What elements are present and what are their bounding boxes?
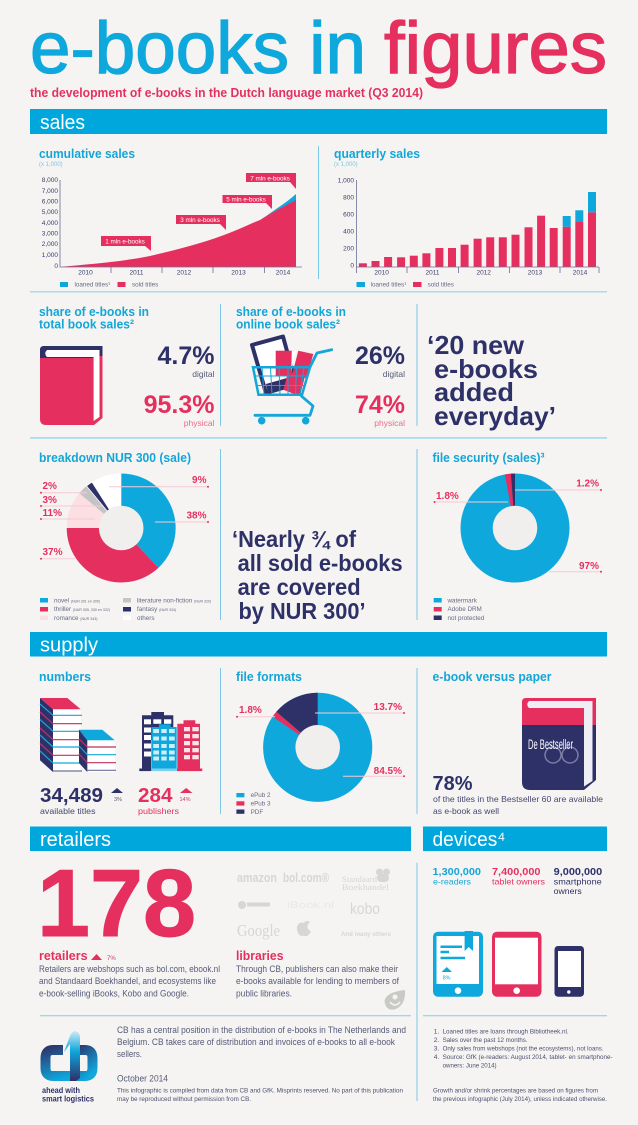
panel: file formats: file formats bbox=[236, 669, 302, 684]
icon: tablet bbox=[492, 932, 542, 997]
area chart bbox=[60, 180, 302, 273]
panel: quarterly sales: 2012 bbox=[476, 270, 491, 276]
footnotes: Sales over the past 12 months. bbox=[443, 1037, 528, 1044]
bar chart bbox=[356, 180, 599, 273]
icon: red book bbox=[40, 346, 102, 425]
panel: cumulative sales: 2014 bbox=[276, 270, 291, 276]
leader labels bbox=[236, 702, 405, 777]
legend bbox=[434, 598, 485, 622]
leader labels: 1.8% bbox=[239, 705, 262, 716]
panel: cumulative sales: 3,000 bbox=[42, 230, 58, 238]
text block: libraries bbox=[236, 948, 399, 998]
icon: bestseller book: De Bestseller bbox=[528, 736, 573, 752]
icon: library logo bbox=[384, 990, 405, 1010]
panel: cumulative sales: 8,000 bbox=[42, 177, 58, 184]
tagline: smart logistics bbox=[42, 1094, 95, 1104]
leader labels: 1.2% bbox=[576, 478, 599, 490]
legend: loaned titles¹ bbox=[371, 282, 406, 288]
panel: share of e-books in online book sales bbox=[236, 304, 405, 428]
panel: quarterly sales: 600 bbox=[343, 212, 354, 218]
footnotes: Growth and/or shrink percentages are based on figures from bbox=[433, 1088, 598, 1095]
section bar: supply bbox=[30, 632, 607, 656]
devices counts: 9,000,000 bbox=[554, 866, 602, 878]
text block: about CB: sellers. bbox=[117, 1049, 142, 1059]
stat: available titles bbox=[40, 785, 123, 816]
legend: Adobe DRM bbox=[448, 606, 482, 613]
text block: about CB: October 2014 bbox=[117, 1074, 168, 1084]
panel: e-book versus paper bbox=[432, 669, 603, 816]
text block: retailers: Retailers are webshops such as bol.com, ebook.nl bbox=[39, 964, 220, 974]
panel: e-book versus paper: of the titles in the Bestseller 60 are available bbox=[433, 794, 603, 804]
text block: libraries: libraries bbox=[236, 948, 284, 963]
section bar: sales: sales bbox=[40, 112, 85, 134]
quote: 20 new e-books: added bbox=[434, 377, 514, 407]
panel: quarterly sales: quarterly sales bbox=[334, 146, 420, 161]
stat: publishers bbox=[138, 785, 192, 816]
panel: cumulative sales: 2011 bbox=[130, 270, 144, 276]
quote: nearly three quarters: ‘Nearly ¾ of bbox=[232, 526, 356, 552]
leader labels bbox=[40, 475, 209, 560]
retailer logos: kobo bbox=[350, 901, 380, 918]
leader labels: 1.8% bbox=[436, 491, 459, 502]
subtitle: the development of e-books in the Dutch language market (Q3 2014) bbox=[30, 85, 423, 100]
title bbox=[30, 8, 607, 89]
panel: cumulative sales: 2,000 bbox=[42, 241, 58, 248]
callout: 5 mln bbox=[222, 195, 272, 209]
section bar: devices: devices⁴ bbox=[432, 829, 506, 851]
text block: retailers: retailers bbox=[39, 948, 88, 963]
footnotes: 3. bbox=[434, 1045, 439, 1052]
callout: 1 mln bbox=[101, 236, 151, 251]
text block: about CB: This infographic is compiled from data from CB and GfK. Misprints reserved. No part of this publication bbox=[117, 1088, 403, 1095]
retailer logos: bol.com® bbox=[283, 871, 330, 885]
text block: about CB: Belgium. CB takes care of distribution and invoices of e-books to all e-book bbox=[117, 1037, 395, 1047]
retailer logos: Google bbox=[237, 921, 280, 940]
footnotes: 4. bbox=[434, 1054, 439, 1061]
icon: shopping cart bbox=[252, 336, 332, 425]
donut chart: NUR 300 bbox=[67, 474, 176, 582]
legend: sold titles bbox=[428, 282, 454, 288]
panel: numbers: numbers bbox=[39, 669, 91, 684]
devices counts: owners bbox=[554, 886, 582, 896]
panel: cumulative sales: (x 1,000) bbox=[39, 162, 63, 168]
panel: share of e-books in online book sales: digital bbox=[383, 369, 405, 379]
legend: ePub 3 bbox=[251, 800, 271, 808]
quote: 20 new e-books: everyday’ bbox=[434, 401, 556, 431]
leader labels: 84.5% bbox=[374, 766, 402, 777]
panel: share of e-books in total book sales bbox=[39, 304, 215, 428]
footnotes: 1. bbox=[434, 1028, 439, 1035]
leader labels: 3% bbox=[42, 495, 57, 506]
stat: available titles: 34,489 bbox=[40, 785, 103, 807]
tagline: ahead with bbox=[42, 1086, 80, 1095]
panel: quarterly sales: 2010 bbox=[374, 270, 389, 276]
quote: 20 new e-books: e-books bbox=[434, 354, 538, 384]
legend: thriller (NUR 305, 330 en 332) bbox=[54, 606, 110, 613]
text block: retailers: 7% bbox=[107, 956, 116, 962]
panel: e-book versus paper: 78% bbox=[432, 773, 473, 795]
legend: not protected bbox=[448, 615, 485, 622]
section bar: retailers bbox=[30, 826, 411, 851]
text block: libraries: Through CB, publishers can also make their bbox=[236, 964, 398, 974]
retailer logos: iBook.nl bbox=[287, 900, 334, 910]
panel: cumulative sales: cumulative sales bbox=[39, 146, 135, 161]
panel: cumulative sales: 0 bbox=[54, 263, 58, 270]
quote: 20 new e-books bbox=[427, 330, 556, 431]
icon: buildings bbox=[139, 712, 202, 771]
retailer logos: And many others bbox=[341, 931, 391, 938]
leader labels: 11% bbox=[42, 508, 62, 519]
panel: cumulative sales: 2012 bbox=[177, 270, 192, 276]
legend bbox=[356, 282, 454, 288]
panel: quarterly sales: 0 bbox=[350, 262, 354, 270]
stat: available titles: available titles bbox=[40, 806, 96, 816]
devices counts: 1,300,000 bbox=[432, 866, 481, 878]
panel: file security bbox=[432, 450, 602, 622]
panel: cumulative sales: 2013 bbox=[231, 270, 246, 276]
leader labels: 37% bbox=[42, 547, 63, 558]
stat: publishers: 14% bbox=[180, 797, 191, 803]
panel: share of e-books in total book sales: total book sales² bbox=[39, 316, 135, 332]
text block: about CB: CB has a central position in the distribution of e-books in The Netherlands and bbox=[117, 1025, 406, 1035]
panel: quarterly sales: 800 bbox=[343, 194, 354, 202]
panel: cumulative sales: 1,000 bbox=[42, 252, 58, 259]
panel: quarterly sales bbox=[334, 146, 599, 288]
panel: numbers bbox=[39, 669, 202, 816]
stat: available titles: 3% bbox=[114, 797, 122, 803]
section bar: supply: supply bbox=[40, 634, 98, 656]
panel: e-book versus paper: as e-book as well bbox=[433, 806, 499, 816]
panel: share of e-books in online book sales: online book sales² bbox=[236, 316, 341, 332]
devices counts: tablet owners bbox=[492, 876, 545, 886]
legend bbox=[236, 792, 271, 816]
panel: cumulative sales: 7,000 bbox=[42, 188, 58, 195]
retailer logos: Boekhandel bbox=[342, 883, 390, 892]
leader labels: 9% bbox=[192, 475, 207, 486]
quote: 20 new e-books: ‘20 new bbox=[427, 330, 525, 360]
stat: publishers: 284 bbox=[138, 785, 173, 807]
retailer logos: Standaard bbox=[342, 875, 377, 884]
legend: ePub 2 bbox=[251, 792, 271, 799]
icon: smartphone bbox=[554, 946, 584, 997]
devices counts: 7,400,000 bbox=[492, 866, 541, 878]
title: figures bbox=[384, 8, 607, 89]
section bar: sales bbox=[30, 109, 607, 134]
footnotes: Only sales from webshops (not the ecosystems), not loans. bbox=[443, 1045, 604, 1052]
leader labels: 13.7% bbox=[374, 702, 402, 713]
legend: others bbox=[137, 615, 155, 622]
icon: e-reader: 8% bbox=[443, 976, 451, 982]
icon: book stacks bbox=[40, 698, 116, 772]
panel: cumulative sales bbox=[39, 146, 302, 288]
panel: quarterly sales: 2011 bbox=[426, 270, 440, 276]
tagline bbox=[42, 1086, 95, 1104]
legend: watermark bbox=[446, 598, 478, 604]
panel: quarterly sales: 200 bbox=[343, 246, 354, 252]
panel: breakdown NUR 300: breakdown NUR 300 (sale) bbox=[39, 450, 191, 465]
logo: cb bbox=[46, 1031, 92, 1081]
callout: 7 mln bbox=[246, 173, 296, 189]
panel: quarterly sales: 1,000 bbox=[338, 178, 354, 184]
leader labels: 97% bbox=[579, 561, 599, 572]
text block: libraries: e-books available for lending to members of bbox=[236, 976, 399, 986]
panel: cumulative sales: 6,000 bbox=[42, 198, 58, 206]
panel: file formats bbox=[236, 669, 405, 816]
panel: e-book versus paper: e-book versus paper bbox=[432, 669, 552, 684]
footnotes bbox=[433, 1028, 613, 1103]
panel: cumulative sales: 5,000 bbox=[42, 209, 58, 216]
devices counts: e-readers bbox=[433, 876, 471, 886]
callout: 1 mln: 1 mln e-books bbox=[105, 238, 145, 246]
quote: nearly three quarters: are covered bbox=[238, 574, 361, 600]
footnotes: Loaned titles are loans through Bibliotheek.nl. bbox=[443, 1028, 569, 1035]
legend bbox=[60, 282, 158, 288]
icon: bestseller book bbox=[522, 698, 596, 790]
quote: nearly three quarters: all sold e-books bbox=[238, 550, 403, 576]
legend: literature non-fiction (NUR 320) bbox=[137, 598, 211, 604]
text block: about CB bbox=[117, 1025, 406, 1103]
donut chart: file formats bbox=[263, 693, 372, 802]
section bar: devices bbox=[423, 826, 607, 851]
panel: share of e-books in total book sales: share of e-books in bbox=[39, 304, 149, 319]
icon: e-reader bbox=[433, 931, 483, 997]
panel: breakdown NUR 300 bbox=[39, 450, 211, 622]
panel: share of e-books in total book sales: 95.3% bbox=[144, 391, 214, 419]
quote: nearly three quarters bbox=[232, 526, 403, 624]
panel: quarterly sales: 2014 bbox=[573, 270, 588, 276]
callout: 7 mln: 7 mln e-books bbox=[250, 176, 290, 182]
callout: 3 mln: 3 mln e-books bbox=[180, 217, 220, 224]
quote: nearly three quarters: by NUR 300’ bbox=[238, 598, 366, 624]
stat: publishers: publishers bbox=[138, 806, 179, 816]
text block: retailers bbox=[39, 948, 220, 998]
footnotes: 2. bbox=[434, 1037, 439, 1044]
devices counts bbox=[432, 866, 602, 896]
legend: romance (NUR 343) bbox=[54, 615, 97, 622]
footnotes: owners: June 2014) bbox=[443, 1062, 497, 1069]
panel: share of e-books in total book sales: 4.7% bbox=[158, 342, 214, 370]
donut chart: file security bbox=[460, 474, 570, 582]
legend: novel (NUR 301 en 305) bbox=[54, 598, 100, 604]
legend: PDF bbox=[251, 809, 263, 816]
panel: quarterly sales: 400 bbox=[343, 228, 354, 236]
legend bbox=[40, 598, 211, 622]
legend: fantasy (NUR 334) bbox=[137, 606, 176, 613]
panel: share of e-books in online book sales: 74% bbox=[355, 391, 405, 419]
panel: cumulative sales: 4,000 bbox=[42, 220, 58, 227]
panel: quarterly sales: (x 1,000) bbox=[334, 162, 358, 168]
panel: share of e-books in online book sales: share of e-books in bbox=[236, 304, 346, 319]
leader labels: 38% bbox=[186, 510, 207, 522]
panel: cumulative sales: 2010 bbox=[78, 270, 93, 276]
retailer logos bbox=[237, 868, 391, 940]
devices counts: smartphone bbox=[554, 876, 602, 886]
text block: retailers: and Standaard Boekhandel, and ecosystems like bbox=[39, 976, 216, 986]
leader labels bbox=[434, 478, 602, 573]
text block: about CB: may be reproduced without permission from CB. bbox=[117, 1096, 251, 1103]
footnotes: the previous infographic (July 2014), unless indicated otherwise. bbox=[433, 1096, 607, 1103]
panel: share of e-books in online book sales: 26% bbox=[355, 342, 405, 370]
section bar: retailers: retailers bbox=[40, 829, 111, 851]
panel: share of e-books in total book sales: digital bbox=[192, 369, 215, 379]
panel: share of e-books in total book sales: physical bbox=[184, 418, 215, 428]
callout: 5 mln: 5 mln e-books bbox=[226, 196, 266, 204]
text block: retailers: e-book-selling iBooks, Kobo and Google. bbox=[39, 988, 189, 998]
panel: file security: file security (sales)³ bbox=[432, 450, 545, 465]
panel: share of e-books in online book sales: physical bbox=[374, 418, 405, 428]
panel: quarterly sales: 2013 bbox=[528, 270, 543, 276]
leader labels: 2% bbox=[42, 481, 57, 492]
footnotes: Source: GfK (e-readers: August 2014, tablet- en smartphone- bbox=[443, 1054, 613, 1061]
callout: 3 mln bbox=[176, 215, 226, 230]
title: e-books in bbox=[30, 8, 366, 89]
text block: libraries: public libraries. bbox=[236, 988, 292, 998]
big number: 178: 178 bbox=[37, 850, 196, 957]
legend: sold titles bbox=[132, 282, 158, 288]
retailer logos: amazon bbox=[237, 871, 277, 885]
legend: loaned titles¹ bbox=[74, 282, 110, 288]
